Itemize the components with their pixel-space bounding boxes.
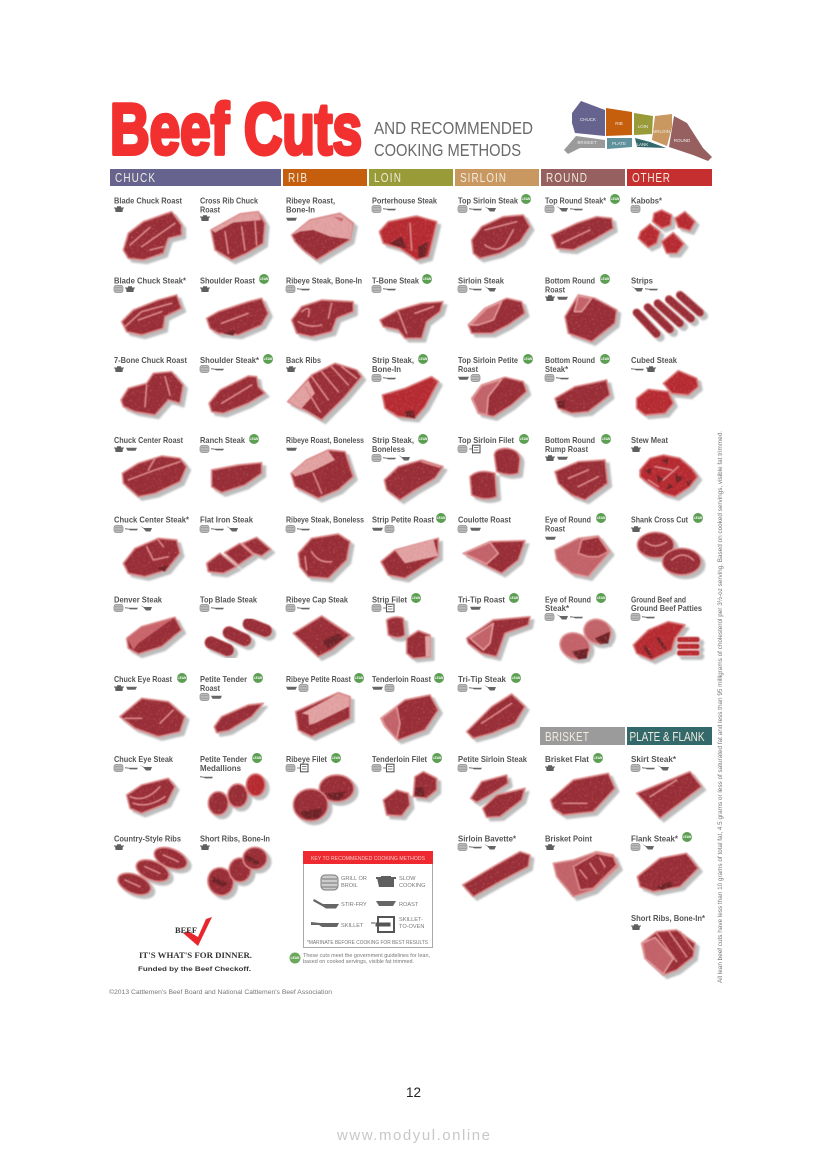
key item: slow cooking — [376, 876, 425, 889]
cut: Bottom Round Steak — [545, 354, 610, 413]
cut: Strip Filet: Strip Filet — [372, 594, 407, 604]
cut: Ground Beef and Ground Beef Patties: Ground Beef Patties — [631, 603, 702, 613]
cut: 7-Bone Chuck Roast: 7-Bone Chuck Roast — [114, 355, 187, 365]
copyright line: ©2013 Cattlemen's Beef Board and National Cattlemen's Beef Association — [109, 988, 332, 996]
cut: Cross Rib Chuck Roast: Roast — [200, 204, 220, 214]
cut: Eye of Round Roast: Eye of Round — [545, 514, 591, 524]
cut: Tri-Tip Roast — [458, 593, 530, 657]
cut: Strip Steak, Boneless: Strip Steak, — [372, 435, 414, 445]
cut: Shank Cross Cut: LEAN — [694, 516, 703, 520]
cut: Ground Beef and Ground Beef Patties — [631, 594, 702, 660]
section header bands: SIRLOIN — [460, 172, 506, 185]
cow map of primal cuts: PLATE — [612, 141, 626, 146]
cut: Strip Petite Roast: LEAN — [437, 516, 446, 520]
cut: Eye of Round Steak: LEAN — [597, 596, 606, 600]
cow map of primal cuts: BRISKET — [577, 140, 597, 145]
cut: Country-Style Ribs — [114, 834, 190, 899]
cow map of primal cuts: ROUND — [674, 138, 691, 143]
key item: grill or broil: BROIL — [341, 883, 358, 889]
cut: Ranch Steak: Ranch Steak — [200, 435, 245, 445]
cut: Strip Steak, Bone-In: Bone-In — [372, 364, 401, 374]
cut: Flank Steak: LEAN — [683, 835, 692, 839]
section header bands: CHUCK — [115, 172, 155, 185]
cut: Shoulder Steak: LEAN — [264, 357, 273, 361]
cut: Ribeye Filet — [286, 753, 354, 821]
cut: Ribeye Petite Roast: LEAN — [355, 676, 364, 680]
cut: Flat Iron Steak — [200, 514, 271, 573]
cut: Ribeye Steak, Bone-In: Ribeye Steak, Bone-In — [286, 276, 362, 286]
cut: Eye of Round Steak: Steak* — [545, 603, 570, 613]
cut: Strip Steak, Boneless: LEAN — [419, 437, 428, 441]
cut: Strips: Strips — [631, 276, 653, 286]
cut: Bottom Round Roast: Bottom Round — [545, 276, 595, 286]
cut: T-Bone Steak: LEAN — [423, 277, 432, 281]
cut: Bottom Round Roast: Roast — [545, 284, 565, 294]
cut: Ribeye Cap Steak: Ribeye Cap Steak — [286, 594, 348, 604]
cut: Tri-Tip Roast: Tri-Tip Roast — [458, 594, 505, 604]
cut: Chuck Eye Roast: Chuck Eye Roast — [114, 674, 172, 684]
cut: Short Ribs, Bone-In: Short Ribs, Bone-In* — [631, 913, 706, 923]
tagline: IT'S WHAT'S FOR DINNER. — [139, 950, 252, 960]
header band: plate and flank — [627, 727, 712, 745]
cut: Ribeye Steak, Boneless: Ribeye Steak, Boneless — [286, 514, 364, 524]
cut: Short Ribs, Bone-In — [631, 913, 706, 975]
cut: Strips — [631, 276, 700, 334]
cut: Petite Tender Medallions: Petite Tender — [200, 754, 248, 764]
cut: Chuck Center Roast — [114, 435, 187, 497]
section header bands: ROUND — [546, 172, 587, 185]
cut: Tri-Tip Steak: LEAN — [512, 676, 521, 680]
cut: Chuck Center Steak: Chuck Center Steak* — [114, 514, 190, 524]
cut: Shoulder Roast: LEAN — [260, 277, 269, 281]
vertical footnote: All lean beef cuts have less than 10 grams of total fat, 4.5 grams or less of saturated fat and less than 95 milligrams of cholesterol per 3½-oz serving. Based on cooked servings, visible fat trimmed. — [716, 431, 724, 983]
cut: Chuck Center Steak — [114, 514, 190, 577]
cut: Shank Cross Cut — [631, 513, 703, 575]
cut: Tenderloin Roast: LEAN — [435, 676, 444, 680]
title: Beef Cuts: Cuts — [244, 90, 362, 170]
cut: Coulotte Roast: Coulotte Roast — [458, 514, 511, 524]
cut: Short Ribs, Bone-In — [200, 834, 270, 899]
cut: Ribeye Steak, Bone-In — [286, 276, 362, 337]
cut: Strip Steak, Boneless: Boneless — [372, 444, 405, 454]
cut: Eye of Round Roast: Roast — [545, 524, 565, 534]
key item: skillet: SKILLET — [341, 923, 364, 929]
cut: Tenderloin Filet — [372, 753, 442, 816]
cut: Ribeye Roast, Boneless: Ribeye Roast, Boneless — [286, 435, 364, 445]
cut: Strip Steak, Bone-In: LEAN — [419, 357, 428, 361]
cut: Brisket Flat: Brisket Flat — [545, 754, 589, 764]
cut: Top Round Steak — [545, 194, 620, 250]
lean badge explanation: These cuts meet the government guidelines for lean, — [303, 953, 430, 959]
column: other and plate cuts — [631, 196, 706, 975]
cut: Strip Steak, Bone-In: Strip Steak, — [372, 355, 414, 365]
cut: Petite Tender Medallions: LEAN — [253, 756, 262, 760]
section header bands — [110, 169, 712, 186]
cut: Top Sirloin Steak: LEAN — [522, 197, 531, 201]
key item: skillet to oven — [371, 917, 424, 932]
cut: Eye of Round Roast — [545, 513, 610, 577]
cut: 7-Bone Chuck Roast — [114, 355, 187, 415]
cut: Petite Sirloin Steak — [458, 754, 527, 817]
cut: Chuck Eye Roast: LEAN — [178, 676, 187, 680]
cut: Cubed Steak — [631, 355, 698, 415]
cut: Cross Rib Chuck Roast: Cross Rib Chuck — [200, 196, 258, 206]
cut: Kabobs — [631, 196, 695, 253]
cut: Petite Tender Roast: Roast — [200, 683, 220, 693]
cut: Tenderloin Roast — [372, 673, 444, 740]
logo word: BEEF — [175, 925, 197, 935]
cut: Country-Style Ribs: Country-Style Ribs — [114, 834, 181, 844]
cut: Top Round Steak: Top Round Steak* — [545, 196, 607, 206]
cut: Bottom Round Rump Roast — [545, 434, 611, 500]
cut: Eye of Round Steak: Eye of Round — [545, 594, 591, 604]
cut: Eye of Round Roast: LEAN — [597, 516, 606, 520]
cut: Shank Cross Cut: Shank Cross Cut — [631, 514, 688, 524]
section header bands: LOIN — [374, 172, 401, 185]
cut: Top Sirloin Petite Roast — [458, 354, 533, 417]
watermark: www.modyul.online — [336, 1127, 490, 1144]
cut: Flank Steak: Flank Steak* — [631, 834, 679, 844]
key item: skillet to oven: TO-OVEN — [399, 924, 424, 930]
cow map of primal cuts: CHUCK — [580, 117, 596, 122]
cut: Kabobs: Kabobs* — [631, 196, 663, 206]
cut: Blade Chuck Steak — [114, 276, 187, 335]
beef logo and tagline — [138, 917, 252, 973]
header band: brisket — [540, 727, 625, 745]
cut: Bottom Round Steak: LEAN — [601, 357, 610, 361]
cut: Back Ribs: Back Ribs — [286, 355, 321, 365]
cut: Bottom Round Rump Roast: Rump Roast — [545, 444, 588, 454]
cow map of primal cuts: SIRLOIN — [652, 129, 670, 134]
cut: Top Round Steak: LEAN — [611, 197, 620, 201]
section header bands: OTHER — [632, 172, 670, 185]
cow map of primal cuts: LOIN — [638, 124, 648, 129]
cut: Tri-Tip Roast: LEAN — [510, 596, 519, 600]
cow map of primal cuts: FLANK — [634, 142, 648, 147]
cut: Blade Chuck Roast — [114, 196, 182, 260]
cut: Ribeye Roast, Bone-In: Ribeye Roast, — [286, 196, 335, 206]
cut: Skirt Steak — [631, 754, 702, 818]
cut: Top Sirloin Steak: Top Sirloin Steak — [458, 196, 518, 206]
subtitle: AND RECOMMENDED — [374, 118, 533, 138]
cut: Blade Chuck Roast: Blade Chuck Roast — [114, 196, 182, 206]
cut: Ribeye Petite Roast — [286, 673, 364, 737]
cut: Brisket Point — [545, 834, 618, 897]
header band: plate and flank: PLATE & FLANK — [630, 730, 705, 744]
cut: Petite Tender Medallions: Medallions — [200, 763, 241, 773]
lean badge explanation: LEAN — [291, 956, 300, 960]
cut: Shoulder Steak — [200, 354, 273, 413]
cut: Tri-Tip Steak — [458, 673, 525, 738]
cut: T-Bone Steak: T-Bone Steak — [372, 276, 419, 286]
cut: Top Sirloin Petite Roast: LEAN — [524, 357, 533, 361]
cut: Brisket Flat — [545, 753, 615, 815]
cut: Strip Steak, Boneless — [372, 434, 443, 500]
cut: Skirt Steak: Skirt Steak* — [631, 754, 677, 764]
column: chuck cuts — [114, 196, 190, 899]
cut: Chuck Eye Steak: Chuck Eye Steak — [114, 754, 173, 764]
cut: Flat Iron Steak: Flat Iron Steak — [200, 514, 253, 524]
cut: Top Sirloin Petite Roast: Top Sirloin Petite — [458, 355, 518, 365]
cut: Bottom Round Steak: Steak* — [545, 364, 569, 374]
cut: Shoulder Roast — [200, 274, 269, 336]
cut: Eye of Round Steak — [545, 593, 615, 664]
cut: Tenderloin Filet: Tenderloin Filet — [372, 754, 427, 764]
lean badge explanation: based on cooked servings, visible fat trimmed. — [303, 959, 414, 965]
cut: Porterhouse Steak: Porterhouse Steak — [372, 196, 437, 206]
cut: Ribeye Cap Steak — [286, 594, 350, 657]
column: loin cuts — [372, 196, 446, 816]
cut: Porterhouse Steak — [372, 196, 437, 260]
cut: Top Sirloin Steak — [458, 194, 531, 258]
cut: Petite Tender Medallions — [200, 753, 265, 815]
cut: Denver Steak — [114, 594, 182, 654]
cut: Coulotte Roast — [458, 514, 525, 573]
cut: Chuck Center Roast: Chuck Center Roast — [114, 435, 183, 445]
key item: roast: ROAST — [399, 902, 419, 908]
cut: Tenderloin Filet: LEAN — [433, 756, 442, 760]
section header bands: RIB — [288, 172, 307, 185]
cut: Tri-Tip Steak: Tri-Tip Steak — [458, 674, 506, 684]
cut: Flank Steak — [631, 832, 698, 892]
cut: Top Sirloin Petite Roast: Roast — [458, 364, 478, 374]
cut: Sirloin Steak: Sirloin Steak — [458, 276, 504, 286]
cut: Bottom Round Roast: LEAN — [601, 277, 610, 281]
subtitle — [374, 118, 533, 160]
cut: Brisket Point: Brisket Point — [545, 834, 592, 844]
cow map of primal cuts: RIB — [615, 121, 623, 126]
cut: Ribeye Roast, Bone-In — [286, 196, 353, 260]
icon: beef check mark — [183, 917, 212, 946]
cut: T-Bone Steak — [372, 274, 443, 338]
key item: grill or broil: GRILL OR — [341, 876, 367, 882]
cut: Stew Meat: Stew Meat — [631, 435, 668, 445]
cut: Ribeye Roast, Bone-In: Bone-In — [286, 204, 315, 214]
column: round cuts — [545, 194, 620, 897]
key item: slow cooking: COOKING — [399, 883, 425, 889]
cut: Top Sirloin Filet — [458, 434, 529, 499]
title: Beef Cuts: Beef — [110, 90, 230, 170]
cow map of primal cuts — [564, 101, 712, 161]
page number: 12 — [406, 1085, 421, 1100]
cut: Top Sirloin Filet: Top Sirloin Filet — [458, 435, 514, 445]
key to recommended cooking methods — [303, 851, 433, 948]
cut: Petite Tender Roast — [200, 673, 263, 733]
cut: Ground Beef and Ground Beef Patties: Ground Beef and — [631, 594, 686, 604]
cut: Denver Steak: Denver Steak — [114, 594, 162, 604]
cut: Ranch Steak — [200, 434, 262, 493]
cut: Bottom Round Rump Roast: LEAN — [602, 437, 611, 441]
cut: Brisket Flat: LEAN — [594, 756, 603, 760]
key item: grill or broil — [321, 875, 367, 890]
cut: Cubed Steak: Cubed Steak — [631, 355, 677, 365]
cut: Top Sirloin Filet: LEAN — [520, 437, 529, 441]
header band: brisket: BRISKET — [545, 731, 589, 744]
column: sirloin cuts — [458, 194, 533, 897]
cut: Bottom Round Roast — [545, 274, 617, 342]
cut: Ribeye Roast, Boneless — [286, 435, 364, 498]
cut: Ribeye Steak, Boneless — [286, 514, 364, 578]
cut: Chuck Eye Steak — [114, 754, 175, 813]
cut: Short Ribs, Bone-In: Short Ribs, Bone-In — [200, 834, 270, 844]
subtitle: COOKING METHODS — [374, 140, 521, 160]
cut: Petite Tender Roast: Petite Tender — [200, 674, 248, 684]
key footnote: *MARINATE BEFORE COOKING FOR BEST RESULTS — [307, 940, 428, 946]
cut: Petite Tender Roast: LEAN — [254, 676, 263, 680]
cut: Strip Filet — [372, 593, 430, 658]
cut: Tenderloin Roast: Tenderloin Roast — [372, 674, 431, 684]
cut: Bottom Round Rump Roast: Bottom Round — [545, 435, 595, 445]
cut: Cross Rib Chuck Roast — [200, 196, 265, 260]
cut: Top Blade Steak — [200, 594, 266, 650]
cut: Strip Steak, Bone-In — [372, 354, 438, 418]
cut: Petite Sirloin Steak: Petite Sirloin Steak — [458, 754, 527, 764]
column: rib cuts — [286, 196, 364, 821]
cut: Ribeye Petite Roast: Ribeye Petite Roast — [286, 674, 351, 684]
key item: skillet to oven: SKILLET- — [399, 917, 423, 923]
key item: slow cooking: SLOW — [399, 876, 416, 882]
cut: Ribeye Filet: Ribeye Filet — [286, 754, 327, 764]
column: chuck cuts, second column — [200, 196, 273, 899]
title: Beef Cuts — [110, 90, 362, 170]
key item: stir-fry: STIR-FRY — [341, 902, 367, 908]
funding line: Funded by the Beef Checkoff. — [138, 966, 251, 973]
cut: Strip Petite Roast — [372, 513, 446, 578]
cut: Shoulder Steak: Shoulder Steak* — [200, 355, 260, 365]
cut: Chuck Eye Roast — [114, 673, 187, 737]
cut: Sirloin Bavette — [458, 834, 530, 897]
cut: Shoulder Roast: Shoulder Roast — [200, 276, 255, 286]
cut: Strip Filet: LEAN — [412, 596, 421, 600]
cut: Sirloin Bavette: Sirloin Bavette* — [458, 834, 517, 844]
cut: Ribeye Filet: LEAN — [332, 756, 341, 760]
cut: Stew Meat — [631, 435, 698, 497]
cut: Top Blade Steak: Top Blade Steak — [200, 594, 257, 604]
cut: Bottom Round Steak: Bottom Round — [545, 355, 595, 365]
cut: Strip Petite Roast: Strip Petite Roast — [372, 514, 434, 524]
lean badge explanation — [290, 952, 430, 965]
cut: Ranch Steak: LEAN — [250, 437, 259, 441]
cut: Back Ribs — [286, 355, 362, 420]
key header: KEY TO RECOMMENDED COOKING METHODS — [311, 856, 425, 862]
cut: Sirloin Steak — [458, 276, 525, 333]
cut: Blade Chuck Steak: Blade Chuck Steak* — [114, 276, 187, 286]
